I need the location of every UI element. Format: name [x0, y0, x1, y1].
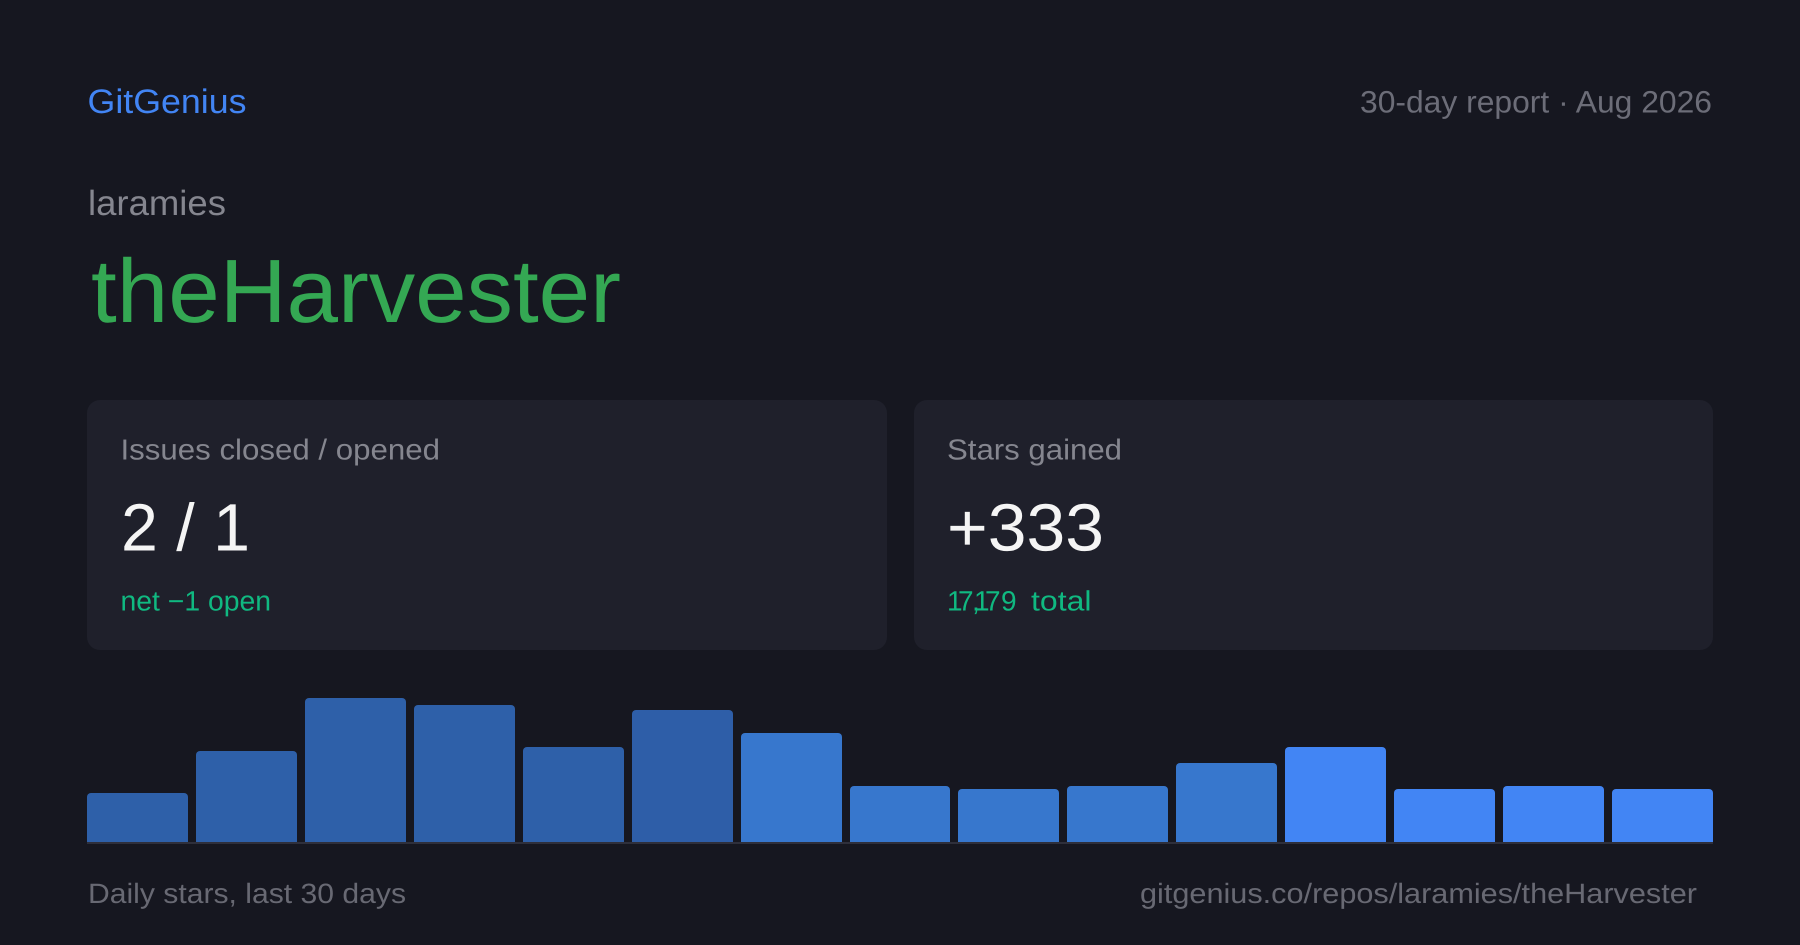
repository url: gitgenius.co/repos/laramies/theHarvester	[1140, 878, 1697, 909]
header	[88, 83, 1712, 121]
brand name: GitGenius	[88, 83, 246, 121]
panel: stars	[914, 400, 1713, 650]
issues label: Issues closed / opened	[120, 434, 440, 466]
chart caption: Daily stars, last 30 days	[88, 878, 406, 909]
stars total	[947, 586, 1092, 616]
report period: 30-day report · Aug 2026	[1360, 84, 1712, 120]
issues value: 2 / 1	[121, 490, 250, 566]
stars label: Stars gained	[947, 434, 1122, 466]
stars value: +333	[947, 490, 1104, 566]
bar chart: daily stars	[87, 698, 1713, 844]
repository title: theHarvester	[91, 242, 621, 342]
repository owner: laramies	[88, 184, 226, 223]
stars total: total	[1031, 586, 1092, 616]
issues net change: net −1 open	[120, 586, 271, 616]
panel: issues	[87, 400, 887, 650]
stars total: 17,179	[947, 586, 1017, 616]
